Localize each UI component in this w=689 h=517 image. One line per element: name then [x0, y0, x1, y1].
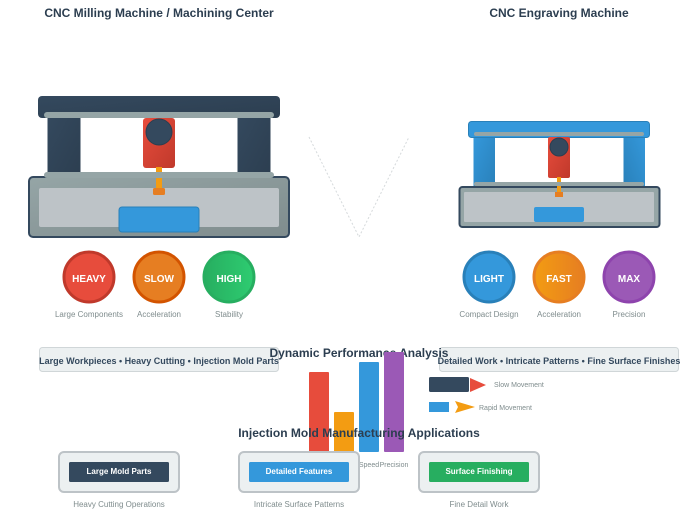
badge: SLOW: SLOW: [144, 274, 175, 285]
illustration: CNC engraving machine: [460, 122, 660, 227]
bar chart: [309, 352, 408, 469]
application: detailed features: Detailed Features: [266, 467, 333, 476]
badge: SLOW: [134, 252, 184, 302]
application: large mold parts: Large Mold Parts: [87, 467, 152, 476]
application: detailed features: Intricate Surface Patterns: [254, 500, 344, 509]
panel: milling uses: [39, 348, 279, 372]
dashed V connector: [309, 137, 409, 237]
application: large mold parts: [59, 452, 179, 509]
panel: engraving uses: Detailed Work • Intricate Patterns • Fine Surface Finishes: [438, 356, 680, 366]
badge: LIGHT: [464, 252, 514, 302]
badge captions: Acceleration: [137, 310, 181, 319]
application: large mold parts: Heavy Cutting Operations: [73, 500, 165, 509]
badge: MAX: [604, 252, 654, 302]
badge: LIGHT: LIGHT: [474, 274, 504, 285]
legend: rapid movement: Rapid Movement: [479, 405, 532, 412]
application: surface finishing: Fine Detail Work: [450, 500, 509, 509]
legend: slow movement: [429, 377, 544, 392]
badge captions: Acceleration: [537, 310, 581, 319]
badge captions: Large Components: [55, 310, 123, 319]
badge: FAST: [534, 252, 584, 302]
badge: FAST: FAST: [546, 274, 572, 285]
badge: HIGH: [204, 252, 254, 302]
title: CNC engraving machine: CNC Engraving Machine: [489, 6, 629, 20]
badge captions: Compact Design: [459, 310, 519, 319]
title: CNC milling machine: CNC Milling Machine / Machining Center: [44, 6, 274, 20]
panel: engraving uses: [438, 348, 680, 372]
legend: rapid movement: [429, 401, 532, 413]
legend: slow movement: Slow Movement: [494, 382, 544, 389]
badge: MAX: MAX: [618, 274, 640, 285]
application: surface finishing: Surface Finishing: [445, 467, 513, 476]
badge: HIGH: HIGH: [216, 274, 242, 285]
badge: HEAVY: [64, 252, 114, 302]
illustration: CNC milling machine: [29, 96, 289, 237]
panel: milling uses: Large Workpieces • Heavy Cutting • Injection Mold Parts: [39, 356, 279, 366]
badge captions: Stability: [215, 310, 243, 319]
badge: HEAVY: HEAVY: [72, 274, 106, 285]
heading: dynamic performance: Dynamic Performance Analysis: [270, 346, 449, 360]
application: detailed features: [239, 452, 359, 509]
bar chart: Speed: [359, 462, 379, 469]
badge captions: [55, 310, 645, 319]
heading: applications: Injection Mold Manufacturing Applications: [238, 426, 480, 440]
badge captions: Precision: [613, 310, 645, 319]
application: surface finishing: [419, 452, 539, 509]
bar chart: Precision: [380, 462, 408, 469]
